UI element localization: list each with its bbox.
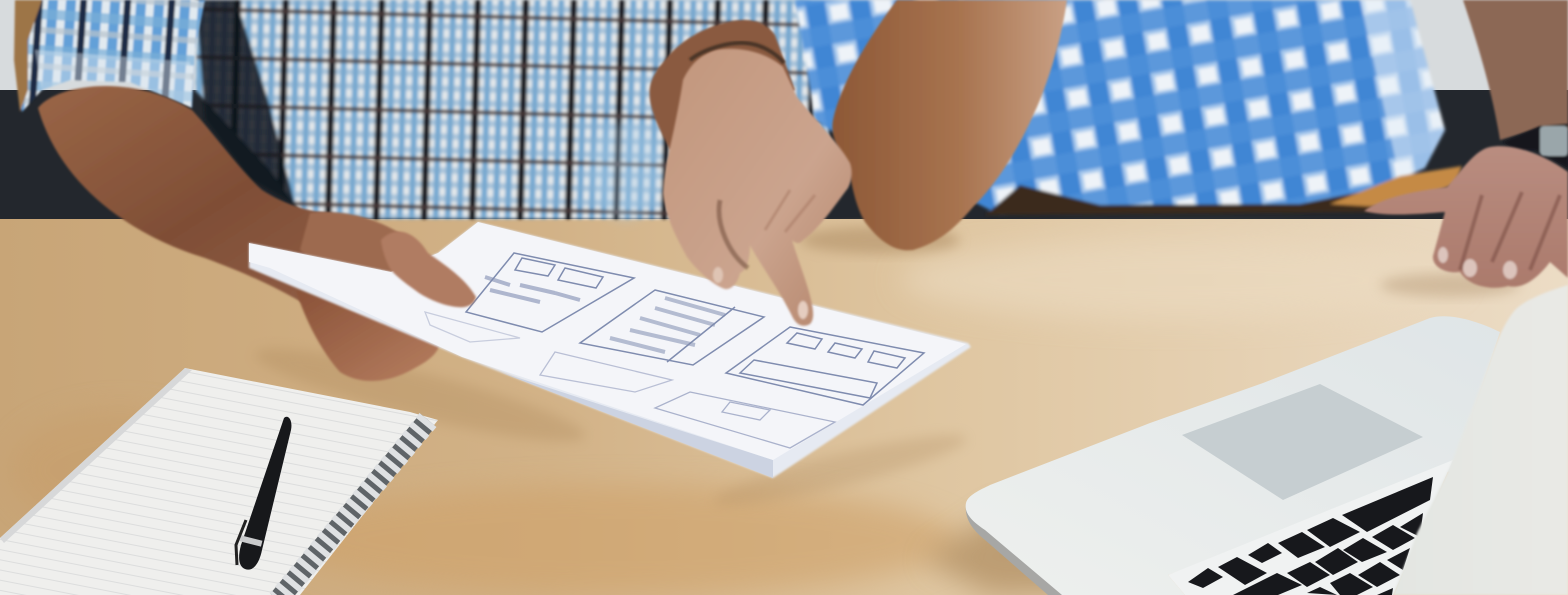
right person: watch [1503,124,1568,168]
right person: bent arm with elbow [832,0,1067,250]
wrist of pointing arm [650,20,795,150]
sketch: right wireframe [726,327,924,405]
spiral notebook [0,368,438,595]
laptop shadow on desk [925,500,1090,595]
left person: forearm [38,86,400,320]
pen on notebook [236,417,291,570]
desk surface [0,219,1568,595]
trackpad [1182,384,1423,500]
sketch: lower wireframes [425,312,835,448]
wireframe sketch sheets held in hand [249,222,971,478]
sketch: centre wireframe [580,290,764,365]
right person: resting hand [1364,146,1568,288]
bracelet [690,43,784,63]
left person: thumb over paper [381,231,476,307]
left person: shirt highlight folds [590,120,660,220]
laptop [966,285,1568,595]
left person: lower hand behind paper [296,290,440,381]
right person: plaid shirt torso [795,0,1462,215]
room background [0,0,1568,225]
keys [1188,477,1433,595]
laptop base [966,316,1500,595]
sketch: top-left wireframe [466,253,634,332]
left person: upper hand [300,212,440,290]
left person: rolled sleeve and bag strap [14,0,205,112]
right person: far forearm [1463,0,1568,140]
laptop screen [1393,285,1568,595]
base front edge [966,505,1070,595]
keyboard well [1168,460,1453,595]
left person: plaid shirt torso [195,0,830,219]
pointing hand [663,49,852,326]
